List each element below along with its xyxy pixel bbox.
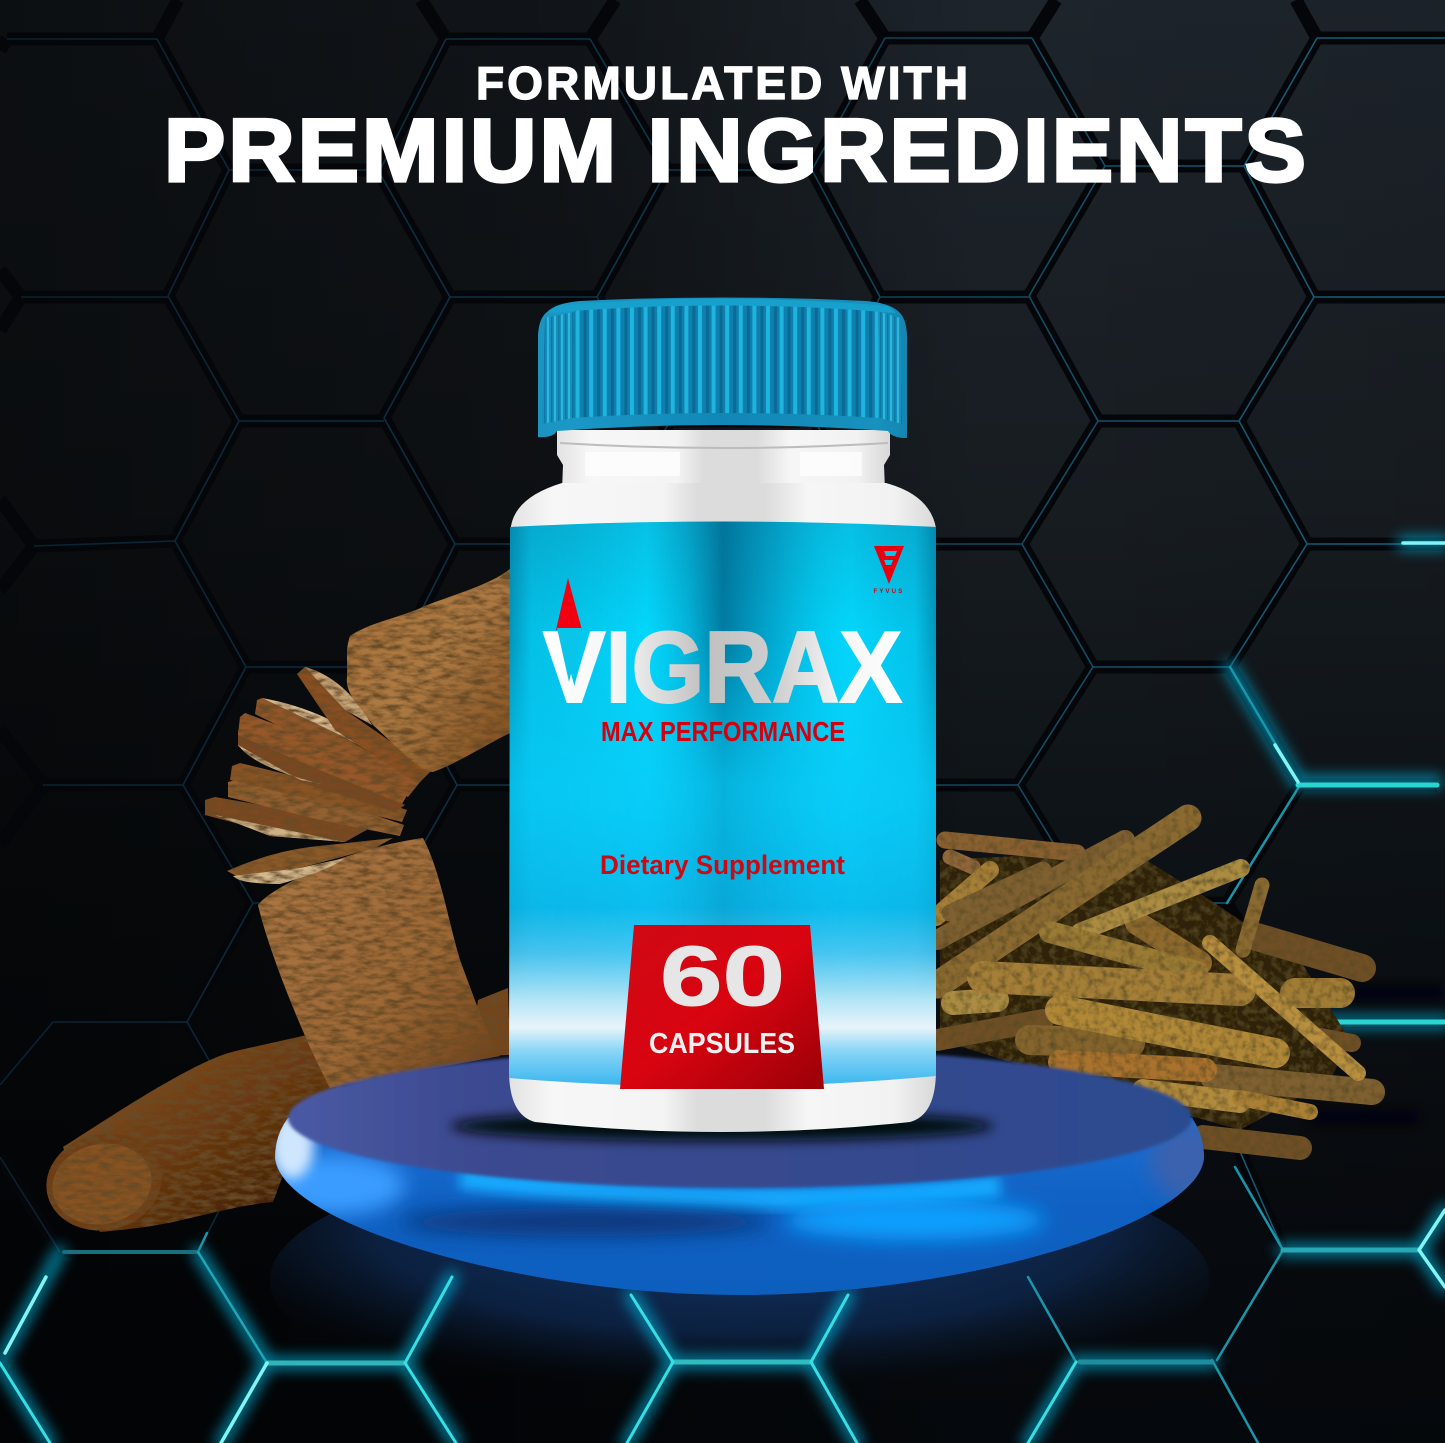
- capsule count badge: CAPSULES: [649, 1028, 795, 1060]
- title line 1: FORMULATED WITH: [476, 57, 971, 109]
- ingredient: ashwagandha root pile, right side: [936, 818, 1372, 1148]
- bottle contact shadow: [450, 1111, 994, 1141]
- neon glowing hexagon edges: [0, 543, 1445, 1443]
- brand logo triangle: [873, 546, 905, 595]
- bottle neck: [557, 430, 890, 490]
- platform top surface: [288, 1048, 1192, 1188]
- platform reflection on floor: [270, 1145, 1210, 1415]
- capsule count badge: [620, 925, 824, 1089]
- cut cassava trunk: [258, 838, 500, 1088]
- brand logo triangle: FYVUS: [873, 589, 905, 595]
- lower cassava root lying down: [37, 1035, 345, 1241]
- brand name: VIGRAX: [543, 612, 902, 724]
- capsule count badge: 60: [660, 929, 785, 1023]
- floating cassava slices: [205, 667, 432, 884]
- bottle base: [509, 1070, 936, 1132]
- title line 2: PREMIUM INGREDIENTS: [164, 100, 1309, 200]
- blue label: [505, 510, 941, 1100]
- ingredient: cassava root, left side: [37, 569, 510, 1241]
- product bottle: [505, 298, 941, 1132]
- tagline: MAX PERFORMANCE: [601, 716, 845, 747]
- blue round platform: [265, 1048, 1219, 1300]
- notch in the V: [557, 628, 582, 682]
- screw cap: [538, 298, 907, 438]
- title: [164, 57, 1309, 200]
- platform side: [275, 1118, 1204, 1295]
- cassava branch behind bottle: [470, 988, 510, 1056]
- upper cassava root: [347, 569, 510, 772]
- bottle shoulder: [510, 483, 936, 540]
- supplement line: Dietary Supplement: [600, 850, 845, 880]
- red peak above V: [556, 578, 582, 630]
- pile shadow on floor: [1310, 985, 1445, 1124]
